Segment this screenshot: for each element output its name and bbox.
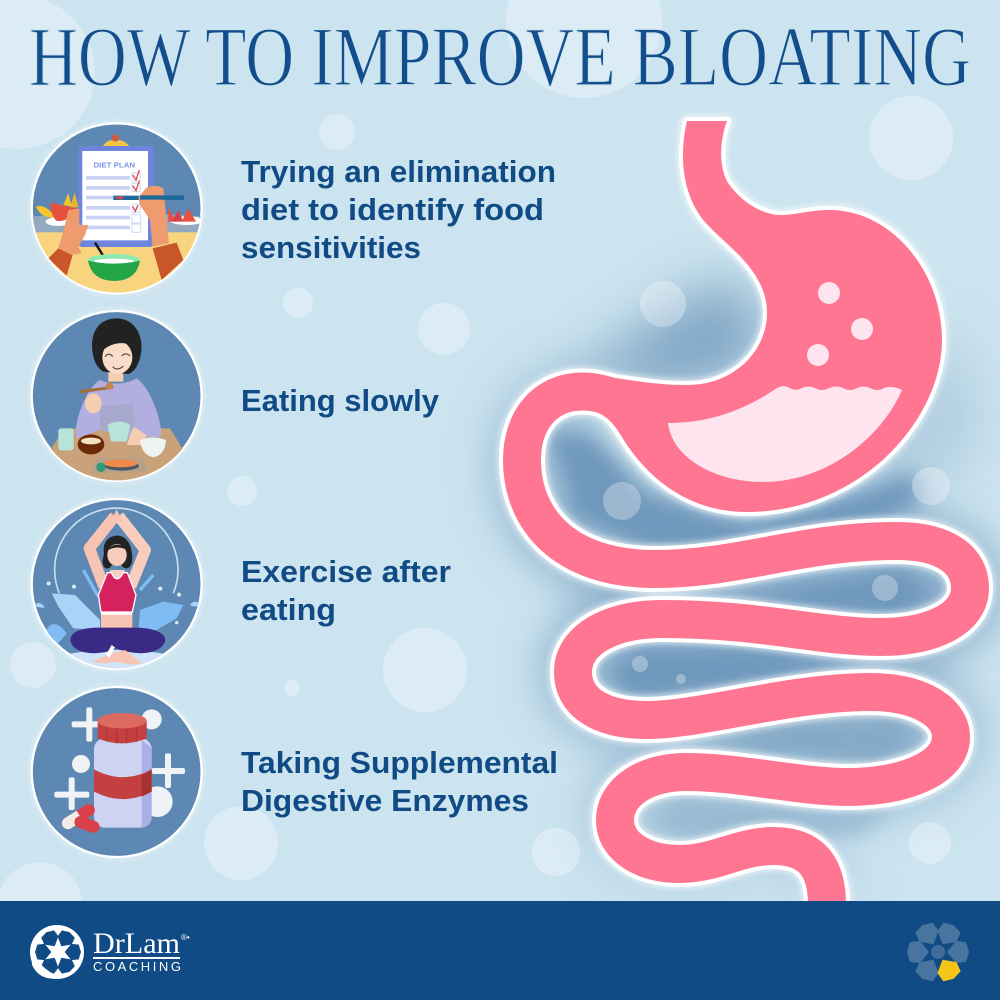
logo emblem bbox=[30, 925, 84, 979]
step 1 text: sensitivities bbox=[241, 230, 421, 265]
stomach liquid bbox=[668, 386, 902, 482]
logo wordmark: COACHING bbox=[93, 959, 181, 974]
step 3 icon: yoga pose bbox=[27, 495, 206, 673]
stomach and intestine illustration bbox=[522, 121, 970, 905]
footer flower icon bbox=[907, 920, 969, 984]
organ shadow bbox=[522, 280, 985, 905]
step 4 text bbox=[241, 745, 558, 818]
step 1 text: Trying an elimination bbox=[241, 154, 556, 189]
step 3 text: Exercise after bbox=[241, 554, 451, 589]
step 3 text: eating bbox=[241, 592, 336, 627]
step 1 icon: diet plan: DIET PLAN bbox=[93, 161, 136, 170]
step 4 icon: supplement bottle bbox=[27, 683, 206, 861]
stomach bubbles bbox=[807, 282, 873, 366]
step 3 text bbox=[241, 554, 451, 627]
step 1 icon: diet plan bbox=[27, 119, 206, 298]
step 1 text bbox=[241, 154, 556, 265]
logo wordmark: DrLam bbox=[93, 927, 180, 960]
logo wordmark bbox=[93, 927, 190, 974]
logo: DrLam Coaching bbox=[30, 925, 190, 979]
step 2 text: Eating slowly bbox=[241, 383, 440, 418]
step 1 text: diet to identify food bbox=[241, 192, 544, 227]
step 4 text: Digestive Enzymes bbox=[241, 783, 529, 818]
logo wordmark: ®• bbox=[181, 933, 190, 942]
step 4 text: Taking Supplemental bbox=[241, 745, 558, 780]
step 2 icon: woman eating bbox=[27, 307, 206, 485]
footer bar bbox=[0, 901, 1000, 1000]
